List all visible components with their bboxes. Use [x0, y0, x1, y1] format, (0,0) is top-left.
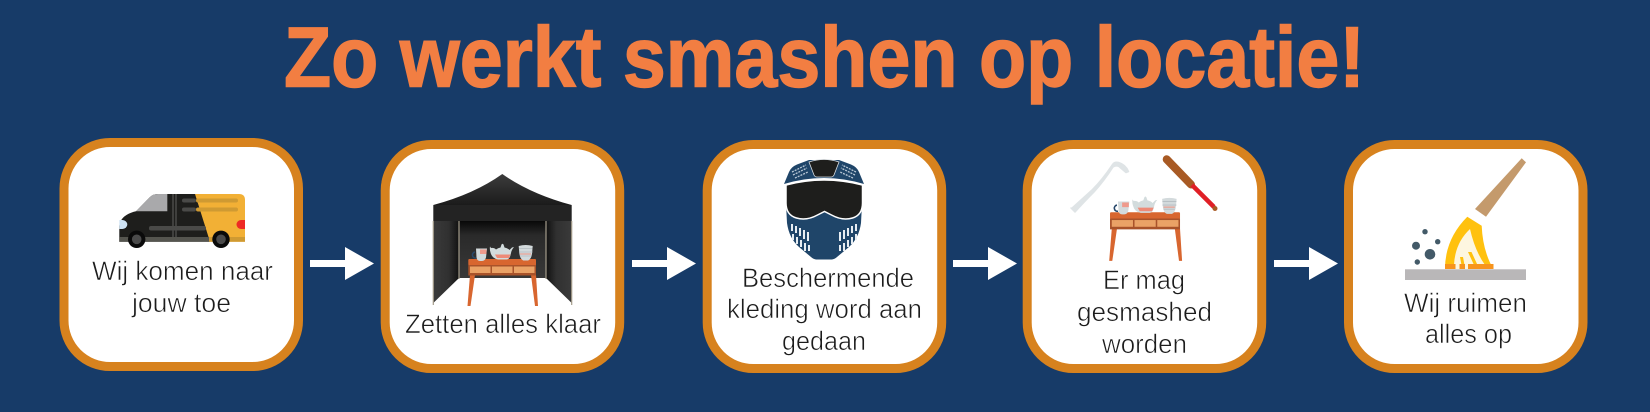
text: er mag gesmashed worden: gesmashed: [1077, 297, 1212, 327]
icon: van: [119, 194, 245, 248]
text: wij ruimen alles op: Wij ruimen: [1404, 288, 1527, 318]
text: beschermende kleding word aan gedaan: gedaan: [782, 326, 866, 356]
panel: wij ruimen alles op: [1348, 144, 1583, 368]
text: wij ruimen alles op: alles op: [1425, 319, 1512, 349]
text: er mag gesmashed worden: Er mag: [1103, 265, 1185, 295]
icon: broom: [1405, 158, 1526, 280]
panel: zetten alles klaar: [385, 144, 620, 368]
arrow 4: [1274, 247, 1338, 280]
title: Zo werkt smashen op locatie!: [284, 10, 1365, 106]
arrow 2: [632, 247, 696, 280]
panel: er mag gesmashed worden: [1027, 144, 1262, 368]
panel: beschermende kleding: [707, 144, 942, 368]
icon: table with crockery: [1109, 197, 1182, 261]
arrow 3: [953, 247, 1017, 280]
text: wij komen naar: Wij komen naar: [92, 256, 273, 286]
icon: baseball bat: [1167, 159, 1218, 211]
panel: wij komen naar jouw toe: [64, 142, 298, 366]
icon: tent with table: [433, 174, 572, 306]
text: zetten alles klaar: Zetten alles klaar: [405, 309, 601, 339]
arrow 1: [310, 247, 374, 280]
icon: protective mask: [784, 160, 864, 260]
text: beschermende kleding word aan gedaan: kleding word aan: [727, 294, 922, 324]
text: beschermende kleding word aan gedaan: Beschermende: [742, 263, 914, 293]
icon: crowbar: [1071, 162, 1128, 212]
text: wij komen naar: jouw toe: [131, 288, 231, 318]
text: er mag gesmashed worden: worden: [1101, 329, 1187, 359]
